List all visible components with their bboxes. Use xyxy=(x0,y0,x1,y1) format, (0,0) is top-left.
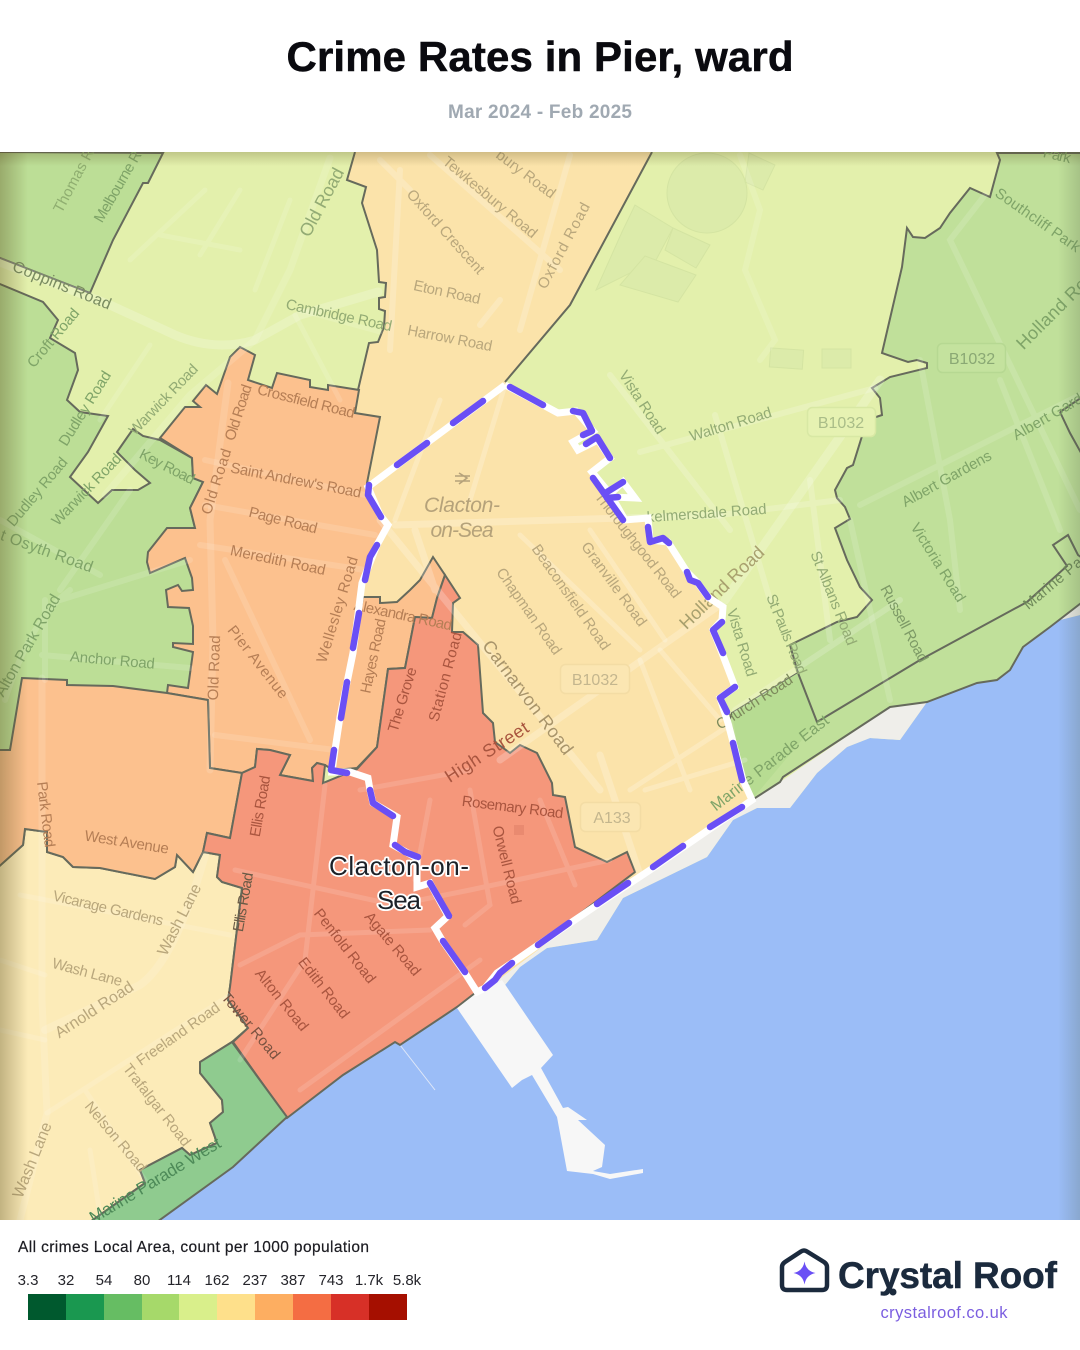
zone: church road green xyxy=(732,673,817,796)
legend: scale values: 5.8k xyxy=(393,1272,422,1289)
label: Orwell Road: Orwell Road xyxy=(488,824,524,906)
pier jetty line xyxy=(400,1045,435,1090)
label: Oxford Crescent: Oxford Crescent xyxy=(403,186,488,278)
legend: colour swatches xyxy=(28,1294,407,1320)
red building xyxy=(514,825,524,835)
label: Wash Lane west: Wash Lane xyxy=(50,955,124,990)
legend title: All crimes Local Area, count per 1000 population xyxy=(18,1239,369,1256)
label: Skelmersdale Road: kelmersdale Road xyxy=(646,501,767,526)
label: Church Road: Church Road xyxy=(713,671,796,733)
label: Old Road south: Old Road xyxy=(205,635,224,701)
label: Hayes Road: Hayes Road xyxy=(357,617,390,695)
ward boundary: purple dashes xyxy=(331,387,742,988)
label: Cambridge Road: Cambridge Road xyxy=(284,296,394,335)
central yellow boundary lines xyxy=(347,152,652,390)
label: Melbourne Road: Melbourne R xyxy=(91,148,146,226)
label: Trafalgar Road: Trafalgar Road xyxy=(119,1061,194,1150)
label: Park: Park xyxy=(1041,144,1073,167)
legend: scale values: 162 xyxy=(204,1272,230,1289)
map edge shading xyxy=(0,152,1080,1220)
road badge: A133: A133 xyxy=(593,810,631,827)
map base: low-crime light green area xyxy=(0,152,1080,985)
label: Oxford Road: Oxford Road xyxy=(534,200,594,292)
label: Wellesley Road: Wellesley Road xyxy=(313,555,362,665)
zone: west green xyxy=(0,282,203,750)
label: Warwick Road north: Warwick Road xyxy=(126,361,202,439)
label: Rosemary Road: Rosemary Road xyxy=(461,793,564,822)
station label: Clacton-on-Sea xyxy=(424,494,500,542)
website url: crystalroof.co.uk xyxy=(880,1304,1008,1322)
road badge: B1032 east: B1032 xyxy=(949,351,995,368)
label: West Avenue: West Avenue xyxy=(83,828,170,858)
zone: south-west yellow xyxy=(0,829,248,1225)
label: Key Road: Key Road xyxy=(136,446,198,488)
legend: scale values: 743 xyxy=(318,1272,344,1289)
label: Old Road upper: Old Road xyxy=(222,382,256,443)
ward boundary: white line xyxy=(332,385,752,992)
place label: Clacton-on-Sea: Clacton-on- xyxy=(329,851,469,881)
label: Alton Road: Alton Road xyxy=(251,966,312,1035)
label: Marine Parade West: Marine Parade West xyxy=(86,1133,225,1227)
label: Anchor Road: Anchor Road xyxy=(69,648,155,673)
zone: park road orange xyxy=(0,678,242,879)
label: Albert Gardens: Albert Gardens xyxy=(899,447,995,511)
beach east xyxy=(1061,605,1080,620)
label: Old Road middle: Old Road xyxy=(198,447,235,517)
label: Arnold Road: Arnold Road xyxy=(52,979,137,1042)
logo icon: house with star xyxy=(782,1250,827,1290)
legend: scale values: 387 xyxy=(280,1272,306,1289)
label: Pier Avenue: Pier Avenue xyxy=(224,622,291,702)
label: Harrow Road: Harrow Road xyxy=(406,322,494,355)
label: St Albans Road: St Albans Road xyxy=(807,549,860,648)
label: Granville Road: Granville Road xyxy=(577,539,650,630)
label: Vicarage Gardens: Vicarage Gardens xyxy=(51,888,165,930)
road badge: B1032 centre xyxy=(560,664,630,694)
label: Thoroughgood Road: Thoroughgood Road xyxy=(591,489,684,602)
label: Carnarvon Road: Carnarvon Road xyxy=(478,636,577,759)
legend: scale values: 1.7k xyxy=(355,1272,384,1289)
zone: central yellow (ward and north) xyxy=(333,152,752,990)
road badge: B1032 north-east: B1032 xyxy=(818,415,864,432)
label: Old Road north: Old Road xyxy=(295,164,348,240)
label: Dudley Road south: Dudley Road xyxy=(4,454,71,530)
sea xyxy=(157,615,1080,1220)
icon: railway station xyxy=(455,473,470,484)
legend: scale values: 237 xyxy=(242,1272,268,1289)
label: Chapman Road: Chapman Road xyxy=(492,565,565,658)
road badge: A133 xyxy=(580,802,640,832)
station label: Clacton-on-Sea: on-Sea xyxy=(430,519,494,542)
label: Alexandra Road: Alexandra Road xyxy=(352,597,454,634)
label: bury Road: bury Road xyxy=(493,147,559,202)
label: Freeland Road: Freeland Road xyxy=(133,999,223,1069)
zone: top-left green xyxy=(0,152,163,293)
zone: west orange xyxy=(147,347,388,781)
pier xyxy=(457,980,643,1179)
label: Eton Road: Eton Road xyxy=(412,277,482,308)
label: Walton Road: Walton Road xyxy=(688,404,774,445)
road badge: B1032 north-east xyxy=(808,408,876,436)
zone: high-crime red xyxy=(203,575,635,1118)
station label: Clacton-on-Sea: Clacton- xyxy=(424,494,500,517)
legend: scale values: 54 xyxy=(96,1272,112,1289)
label: Page Road: Page Road xyxy=(247,504,319,537)
label: Crossfield Road: Crossfield Road xyxy=(256,381,357,422)
label: Edith Road: Edith Road xyxy=(294,954,353,1022)
label: The Grove: The Grove xyxy=(385,665,421,734)
label: St Osyth Road: t Osyth Road xyxy=(0,527,95,576)
label: Saint Andrew's Road: Saint Andrew's Road xyxy=(229,460,363,502)
subtitle: date range: Mar 2024 - Feb 2025 xyxy=(448,102,632,123)
title: Crime Rates in Pier, ward xyxy=(286,33,794,80)
label: Holland Road: Holland Road xyxy=(675,542,768,633)
label: Wash Lane north: Wash Lane xyxy=(155,881,205,959)
label: Meredith Road: Meredith Road xyxy=(229,542,327,579)
place label: Clacton-on-Sea: Sea xyxy=(377,885,422,915)
label: High Street: High Street xyxy=(441,717,532,786)
label: Russell Road: Russell Road xyxy=(877,582,931,665)
legend: scale values xyxy=(18,1272,422,1289)
label: Station Road: Station Road xyxy=(426,630,466,723)
legend: scale values: 80 xyxy=(134,1272,150,1289)
road network xyxy=(0,155,1080,1220)
label: Thomas Road: Thomas R xyxy=(50,146,98,216)
label: Beaconsfield Road: Beaconsfield Road xyxy=(528,541,613,653)
label: Agate Road: Agate Road xyxy=(361,909,424,979)
label: Wash Lane south: Wash Lane xyxy=(10,1120,56,1201)
place label: Clacton-on-Sea xyxy=(329,851,469,915)
label: St Pauls Road: St Pauls Road xyxy=(762,592,810,677)
label: Ellis Road south: Ellis Road xyxy=(230,871,257,933)
legend: scale values: 32 xyxy=(58,1272,74,1289)
road badge: B1032 centre: B1032 xyxy=(572,672,618,689)
label: Vista Road north: Vista Road xyxy=(615,368,669,437)
label: Park Road: Park Road xyxy=(33,781,58,848)
road badge: B1032 east xyxy=(938,344,1006,372)
internal boundaries xyxy=(798,395,1080,722)
label: Tewkesbury Road: Tewkesbury Road xyxy=(439,153,541,242)
label: Croft Road: Croft Road xyxy=(24,305,83,371)
legend: scale values: 3.3 xyxy=(18,1272,38,1289)
label: Marine Parade East: Marine Parade East xyxy=(708,712,833,815)
zone: marine parade west dark green xyxy=(90,1042,287,1222)
label: Penfold Road: Penfold Road xyxy=(310,906,379,987)
beach xyxy=(480,702,927,992)
label: Vista Road south: Vista Road xyxy=(723,607,760,679)
label: Tower Road: Tower Road xyxy=(218,989,283,1063)
label: Victoria Road: Victoria Road xyxy=(907,520,969,605)
label: Dudley Road north: Dudley Road xyxy=(55,368,115,449)
zone: alexandra road orange xyxy=(335,557,445,770)
label: Ellis Road north: Ellis Road xyxy=(247,774,274,838)
legend: scale values: 114 xyxy=(167,1272,191,1289)
label: Warwick Road south: Warwick Road xyxy=(48,451,125,529)
logo wordmark: Crystal Roof xyxy=(838,1255,1058,1296)
zone: right green xyxy=(728,153,1080,800)
label: Coppins Road: Coppins Road xyxy=(10,258,114,313)
label: Nelson Road: Nelson Road xyxy=(81,1098,150,1176)
sports buildings xyxy=(596,153,851,369)
